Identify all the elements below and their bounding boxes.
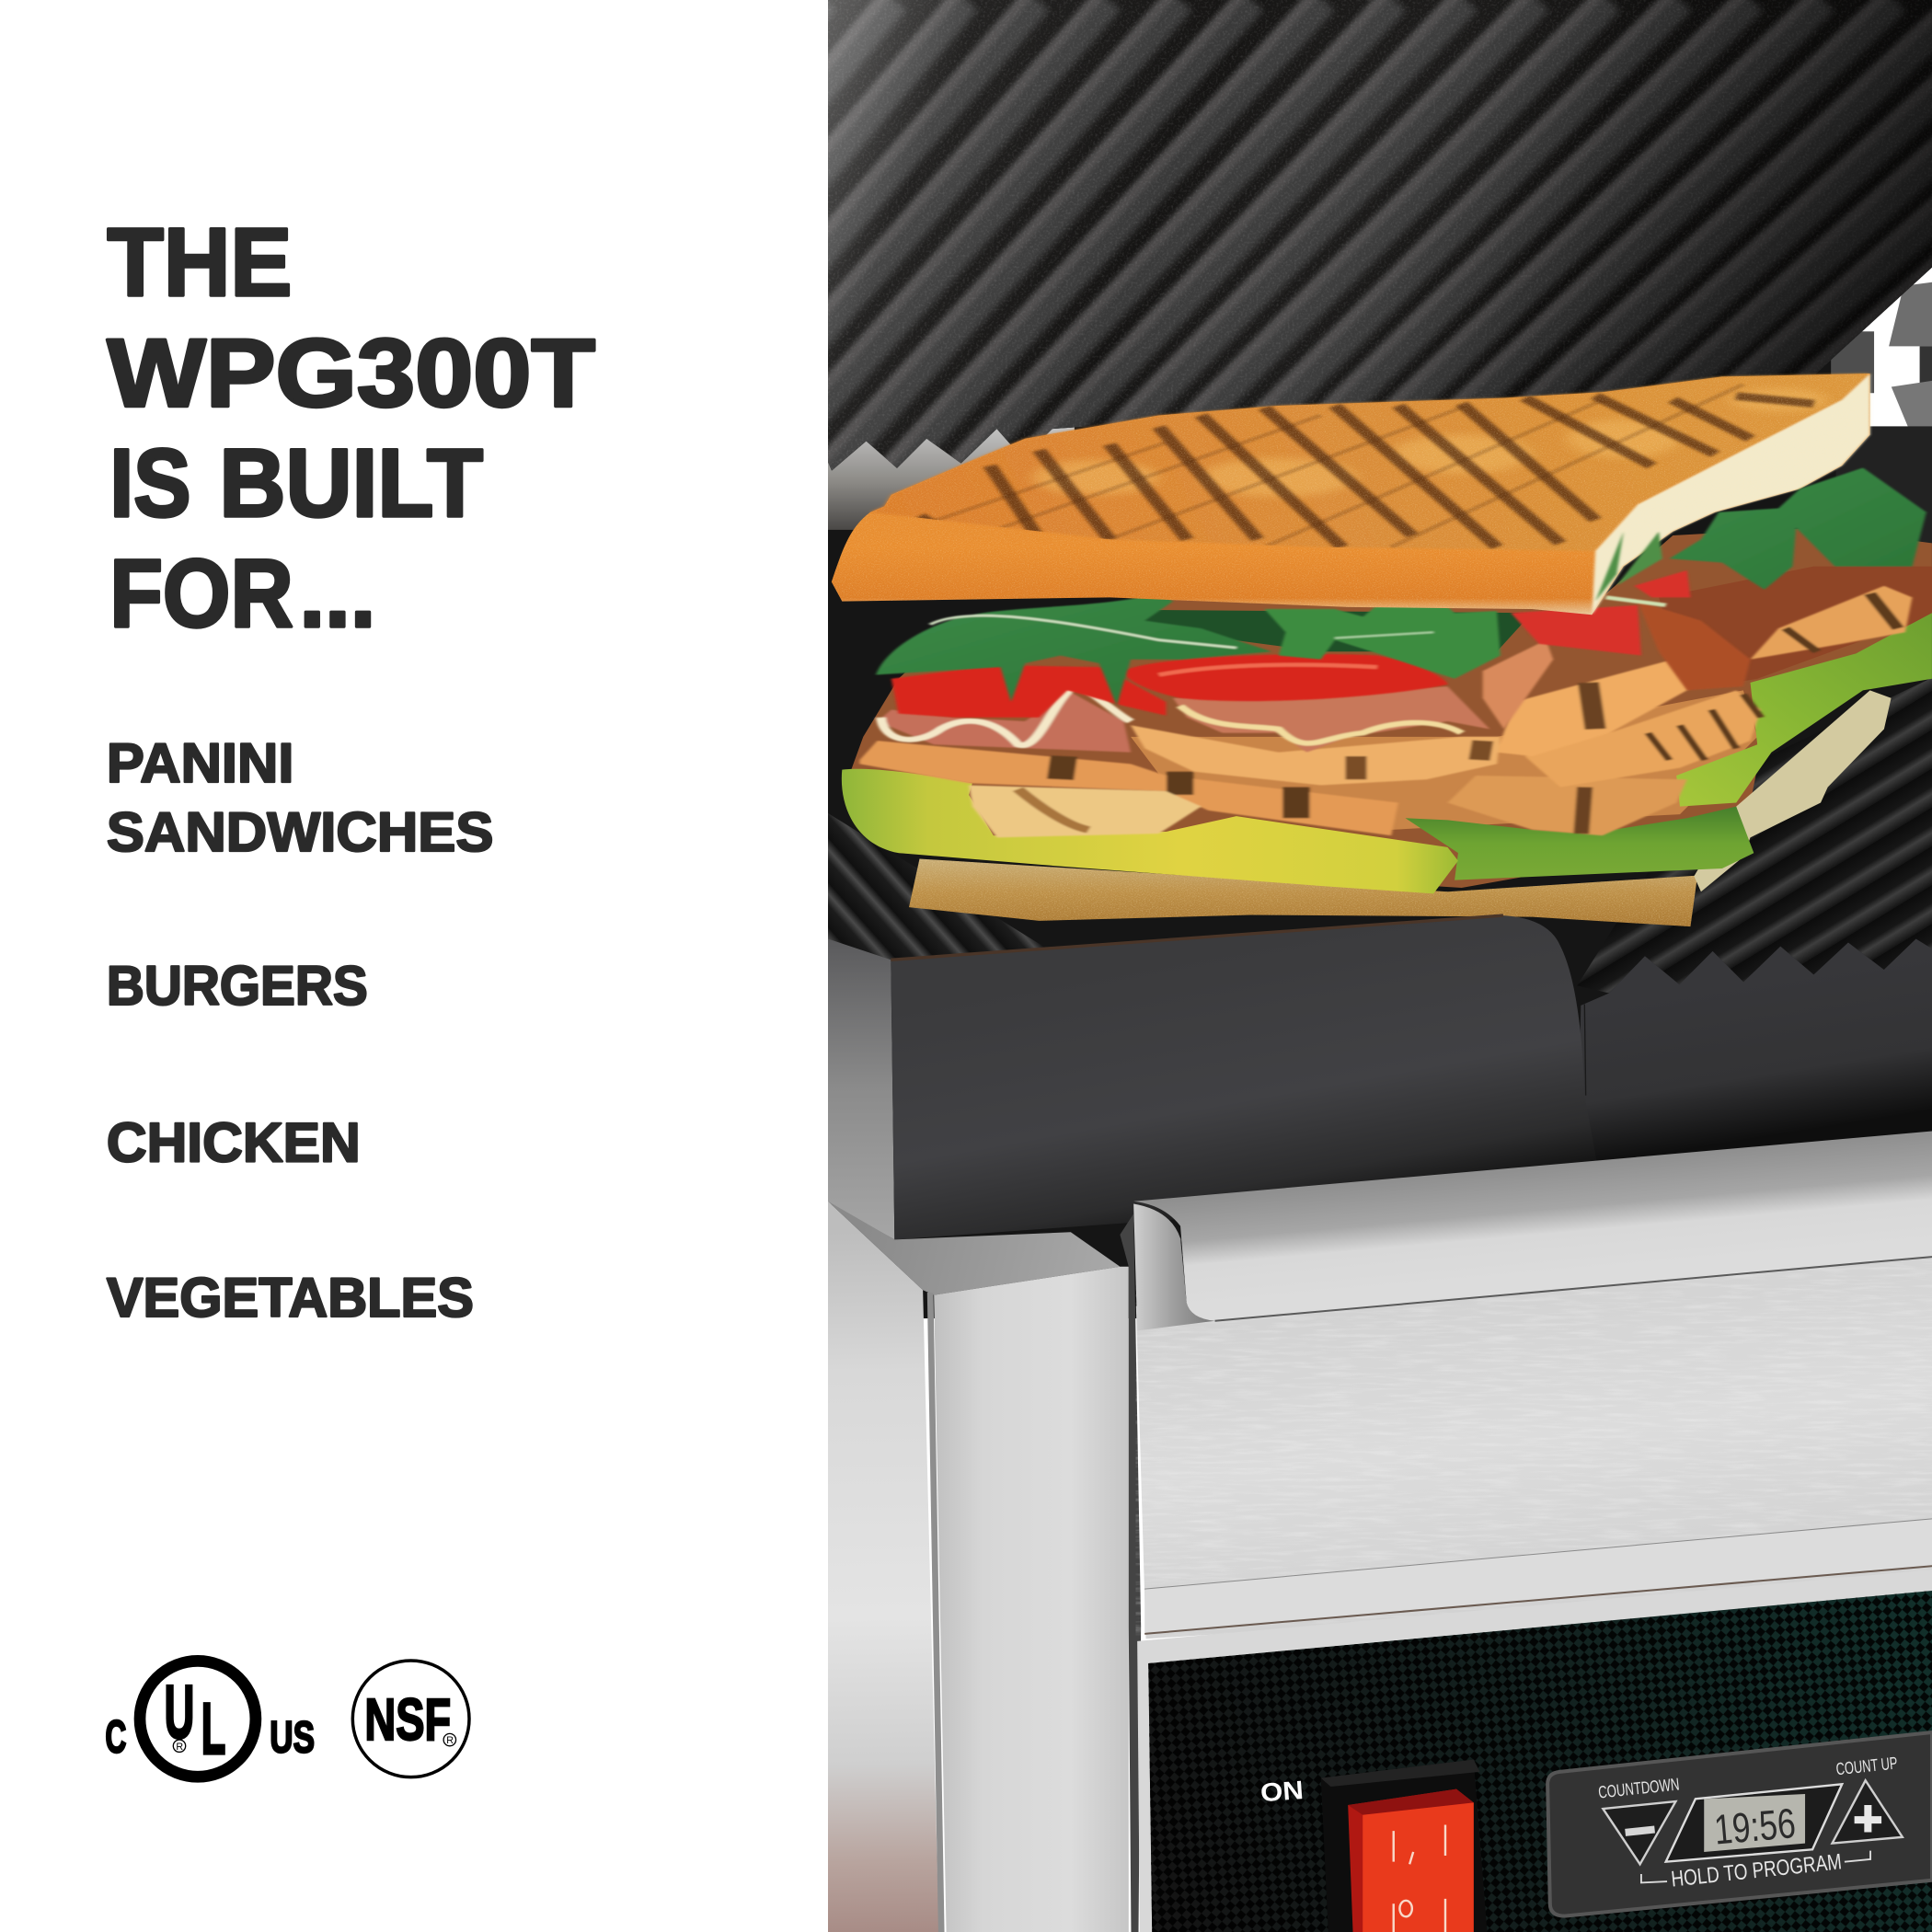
- sandwich: [828, 369, 1932, 930]
- title: WPG300T: [108, 319, 595, 427]
- right upper avocado: [1676, 613, 1932, 807]
- control panel: [1137, 1570, 1932, 1932]
- timer plate: [1547, 1732, 1932, 1916]
- stainless left column: [828, 1202, 1129, 1932]
- food list: PANINI: [107, 731, 293, 794]
- food list: BURGERS: [107, 954, 368, 1017]
- photo: panini grill: [828, 0, 1932, 1932]
- icon: cULus certification mark: U: [165, 1670, 194, 1754]
- icon: cULus certification mark: C: [106, 1710, 126, 1762]
- bacon and ham: [878, 602, 1751, 753]
- food list: VEGETABLES: [107, 1266, 474, 1328]
- food list: SANDWICHES: [107, 800, 493, 863]
- program bracket: [1641, 1851, 1870, 1882]
- left avocado: [842, 769, 1458, 893]
- icon: NSF certification mark: NSF: [364, 1686, 451, 1753]
- title: [108, 209, 595, 648]
- arugula: [876, 576, 1501, 706]
- right greens: [1595, 467, 1926, 605]
- ON label: ON: [1259, 1776, 1305, 1807]
- upper ridged lid: [828, 0, 1932, 471]
- icon: NSF certification mark: R: [446, 1735, 454, 1746]
- dark gap between column and body: [1120, 1213, 1141, 1932]
- top bread grilled surface: [870, 374, 1870, 551]
- steel handle: [1133, 1131, 1932, 1330]
- lower ridged plate, left: [828, 813, 1047, 963]
- rocker switch: [1321, 1759, 1488, 1932]
- countdown label: COUNTDOWN: [1597, 1774, 1680, 1802]
- bottom bread slice: [909, 858, 1697, 926]
- title: ...: [299, 540, 375, 648]
- icon: cULus certification mark: [106, 1661, 315, 1777]
- grill interior backdrop: [828, 247, 1932, 1318]
- LCD screen: [1704, 1794, 1805, 1852]
- chicken slices: [859, 586, 1913, 837]
- icon: cULus certification mark: R: [176, 1742, 183, 1753]
- food list: CHICKEN: [107, 1110, 361, 1173]
- title: IS: [109, 430, 191, 537]
- hold to program label: HOLD TO PROGRAM: [1670, 1849, 1843, 1892]
- time readout: 19:56: [1712, 1800, 1798, 1854]
- stainless body: [1136, 1238, 1932, 1639]
- icon: cULus certification mark: L: [201, 1687, 225, 1769]
- tomato slices: [891, 570, 1690, 718]
- dark front block: [828, 915, 1932, 1239]
- bottom bread cut side: [1694, 690, 1892, 891]
- bread crumb texture: [828, 369, 1884, 621]
- grill marks: [891, 385, 1813, 547]
- bottom bread texture: [909, 859, 1696, 926]
- right avocado: [1406, 807, 1754, 880]
- count up label: COUNT UP: [1835, 1753, 1898, 1778]
- toasted highlights: [1032, 388, 1828, 497]
- title: BUILT: [219, 430, 483, 537]
- icon: NSF certification mark: [352, 1661, 469, 1777]
- icon: cULus certification mark: US: [270, 1712, 315, 1762]
- title: FOR: [109, 540, 293, 648]
- background panel: [0, 0, 828, 1932]
- title: THE: [108, 209, 292, 316]
- lower ridged plate, right: [1577, 678, 1932, 993]
- count up button: [1833, 1780, 1903, 1844]
- display frame: [1666, 1784, 1842, 1862]
- filling base: [849, 528, 1932, 888]
- top bread crust: [832, 374, 1870, 615]
- food list: [107, 731, 493, 1328]
- bread cut face: [1592, 374, 1870, 615]
- countdown button: [1603, 1801, 1675, 1864]
